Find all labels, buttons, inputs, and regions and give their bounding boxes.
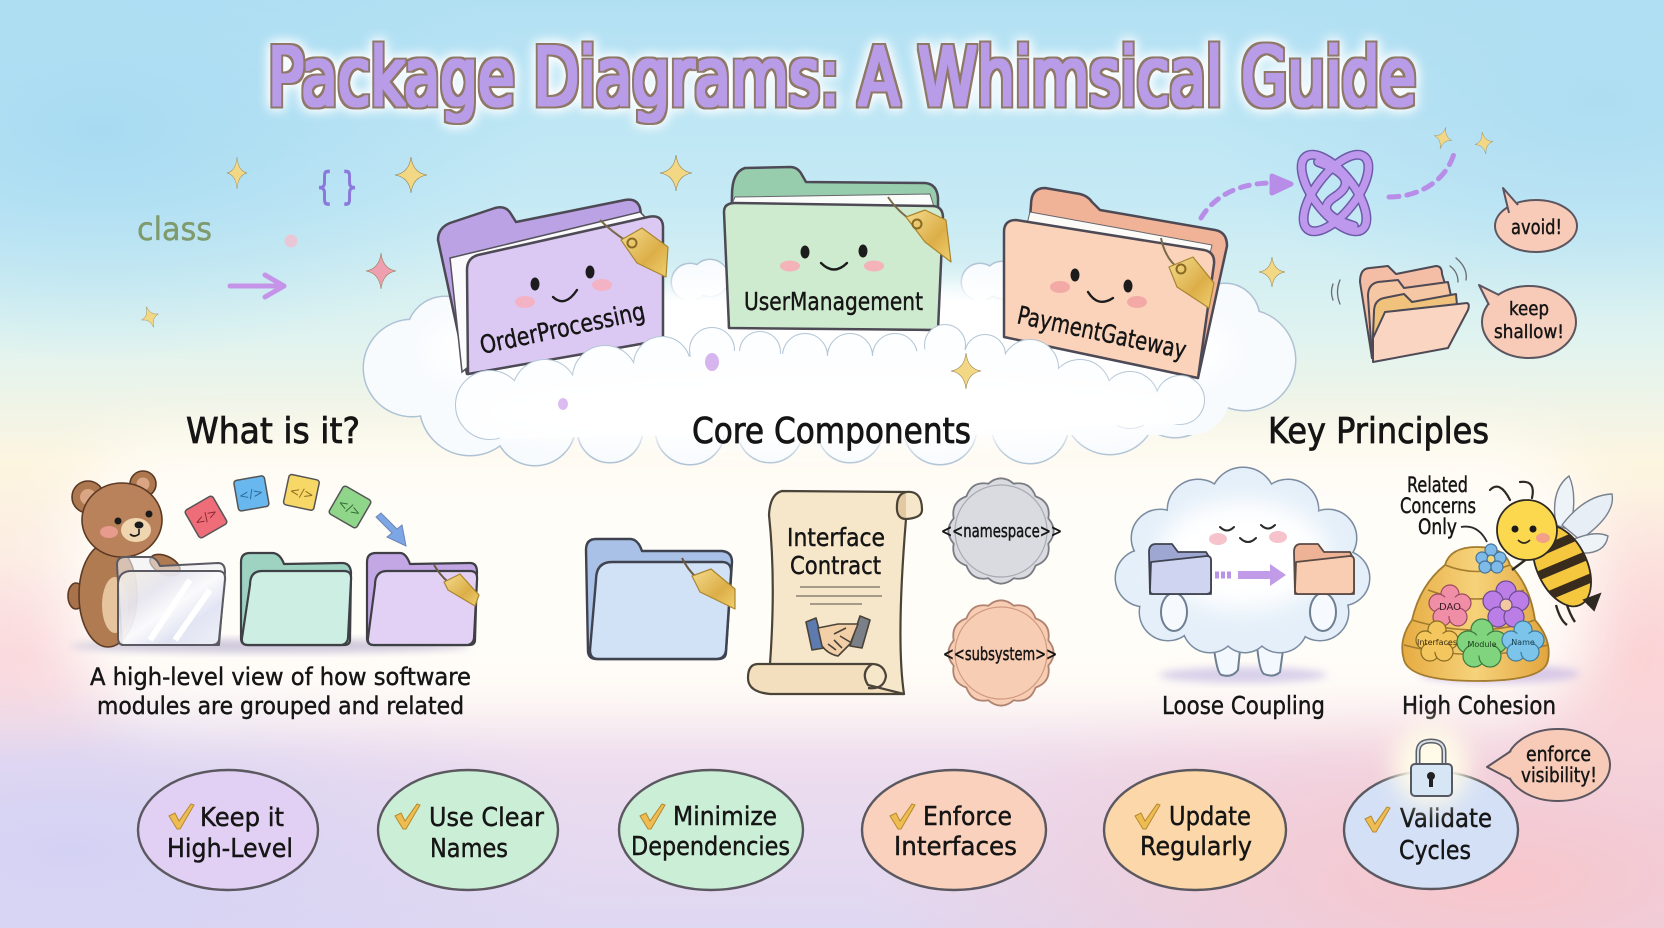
icon: tangled dependency knot <box>1290 144 1380 242</box>
blue flower <box>1502 621 1544 661</box>
note: related concerns only: Concerns <box>1400 494 1476 518</box>
badge: subsystem: <<subsystem>> <box>943 644 1057 665</box>
label: loose coupling: Loose Coupling <box>1162 691 1325 720</box>
description: A high-level view of how software <box>90 663 471 691</box>
cloud sparkle <box>951 353 981 389</box>
best practice: minimize dependencies: Minimize <box>673 802 777 832</box>
icon: curly braces: { } <box>316 164 358 208</box>
icon: nested folder stack <box>1360 266 1469 362</box>
icon: handshake <box>806 616 870 656</box>
callout: keep shallow <box>1479 285 1576 358</box>
panel: what is it <box>68 471 479 720</box>
top blue flower <box>1476 544 1506 573</box>
folder: OrderProcessing <box>438 200 668 374</box>
best practice: minimize dependencies <box>619 770 803 890</box>
icon: gold tag <box>600 220 668 277</box>
best practice: validate cycles <box>1344 771 1518 889</box>
hive body <box>1402 547 1549 681</box>
heading: What is it?: What is it? <box>186 411 360 452</box>
note: related concerns only: Only <box>1418 515 1457 539</box>
panel: core components <box>586 478 1062 706</box>
best practice: enforce interfaces <box>862 770 1046 890</box>
best practice: validate cycles: Cycles <box>1399 836 1471 866</box>
best practice: minimize dependencies: Dependencies <box>631 832 790 862</box>
code cards: </> <box>289 484 315 502</box>
icon: padlock <box>1393 725 1469 805</box>
best practice: update regularly: Regularly <box>1140 832 1252 862</box>
code cards: </> <box>336 496 363 520</box>
callout: keep shallow: shallow! <box>1494 321 1564 343</box>
panel: key principles <box>1116 468 1612 720</box>
pink dot <box>284 234 298 248</box>
blue flower: Name <box>1511 638 1535 647</box>
best practice: keep it high-level: High-Level <box>167 834 293 864</box>
floating code decorations <box>137 125 1495 330</box>
small purple dot <box>558 398 568 410</box>
description: modules are grouped and related <box>97 692 464 720</box>
callout: avoid: avoid! <box>1511 215 1562 239</box>
best practice: use clear names: Use Clear <box>429 803 544 833</box>
contract text: Interface <box>787 523 885 552</box>
icon: bee <box>1490 476 1612 625</box>
badge: namespace <box>941 478 1062 584</box>
badge: subsystem <box>943 600 1057 706</box>
callout: enforce visibility: visibility! <box>1521 763 1597 787</box>
mittens <box>1161 593 1336 631</box>
dependency arrow <box>1215 564 1286 586</box>
heading: Core Components: Core Components <box>692 411 971 452</box>
best practice: use clear names <box>378 770 558 890</box>
icon: teddy bear <box>68 471 183 647</box>
green flower <box>1457 619 1507 667</box>
contract text: Contract <box>790 551 881 580</box>
icon: gold tag <box>682 558 735 609</box>
loose coupling cloud character <box>1116 468 1369 683</box>
contract text <box>787 523 885 580</box>
best practice: keep it high-level <box>138 770 318 890</box>
arrow: into folder <box>376 513 406 546</box>
callout: keep shallow: keep <box>1509 298 1549 320</box>
face <box>515 266 612 308</box>
dashed dependency arrows <box>1201 150 1455 218</box>
legs <box>1212 628 1286 676</box>
teal folder <box>241 553 351 645</box>
best practice: validate cycles: Validate <box>1400 804 1492 834</box>
best practice: update regularly: Update <box>1169 802 1251 832</box>
best practice: enforce interfaces: Enforce <box>923 802 1012 832</box>
best practice: enforce interfaces: Interfaces <box>894 832 1017 862</box>
green flower: Module <box>1467 640 1497 649</box>
note: related concerns only <box>1400 473 1487 542</box>
label: PaymentGateway <box>1015 301 1189 365</box>
pink flower DAO <box>1429 585 1471 626</box>
motion lines <box>1332 258 1466 304</box>
right folder <box>1294 544 1354 594</box>
best practice: keep it high-level: Keep it <box>200 803 284 833</box>
label: high cohesion: High Cohesion <box>1402 691 1556 720</box>
icon: gold tag <box>434 565 479 606</box>
face <box>780 244 884 272</box>
glass folder <box>117 557 225 645</box>
cloud: front layer <box>456 325 1204 448</box>
heading: Key Principles: Key Principles <box>1268 411 1489 452</box>
face <box>1050 268 1147 308</box>
icon: gold tag <box>888 197 951 262</box>
code cards <box>184 474 372 539</box>
label: class keyword: class <box>137 210 212 248</box>
sparkles <box>138 125 1495 330</box>
best practice: update regularly <box>1104 770 1286 890</box>
left folder <box>1149 544 1211 594</box>
callout: avoid <box>1495 188 1577 252</box>
arrow: purple right <box>230 275 284 297</box>
note: related concerns only: Related <box>1407 473 1468 497</box>
face <box>1209 525 1287 545</box>
pink flower DAO: DAO <box>1439 602 1461 613</box>
label: UserManagement <box>744 287 923 316</box>
blue package folder <box>586 539 732 659</box>
purple dot <box>705 353 719 371</box>
purple flower <box>1483 581 1529 627</box>
folder: PaymentGateway <box>1004 188 1227 378</box>
folder: UserManagement <box>724 167 951 330</box>
code cards: </> <box>238 485 264 503</box>
shadow <box>70 639 470 653</box>
best practice: use clear names: Names <box>430 834 508 864</box>
label: OrderProcessing <box>477 297 648 360</box>
high cohesion beehive <box>1400 473 1612 683</box>
icon: gold tag <box>1161 238 1214 308</box>
yellow flower: Interfaces <box>1417 638 1457 647</box>
badge: namespace: <<namespace>> <box>941 521 1062 542</box>
callout: enforce visibility <box>1487 729 1610 801</box>
yellow flower <box>1416 621 1458 661</box>
code cards: </> <box>192 505 220 529</box>
description <box>90 663 471 720</box>
purple folder <box>367 553 477 645</box>
scroll: interface contract <box>748 491 922 694</box>
callout: enforce visibility: enforce <box>1526 742 1591 766</box>
cloud: back layer <box>364 260 1295 465</box>
